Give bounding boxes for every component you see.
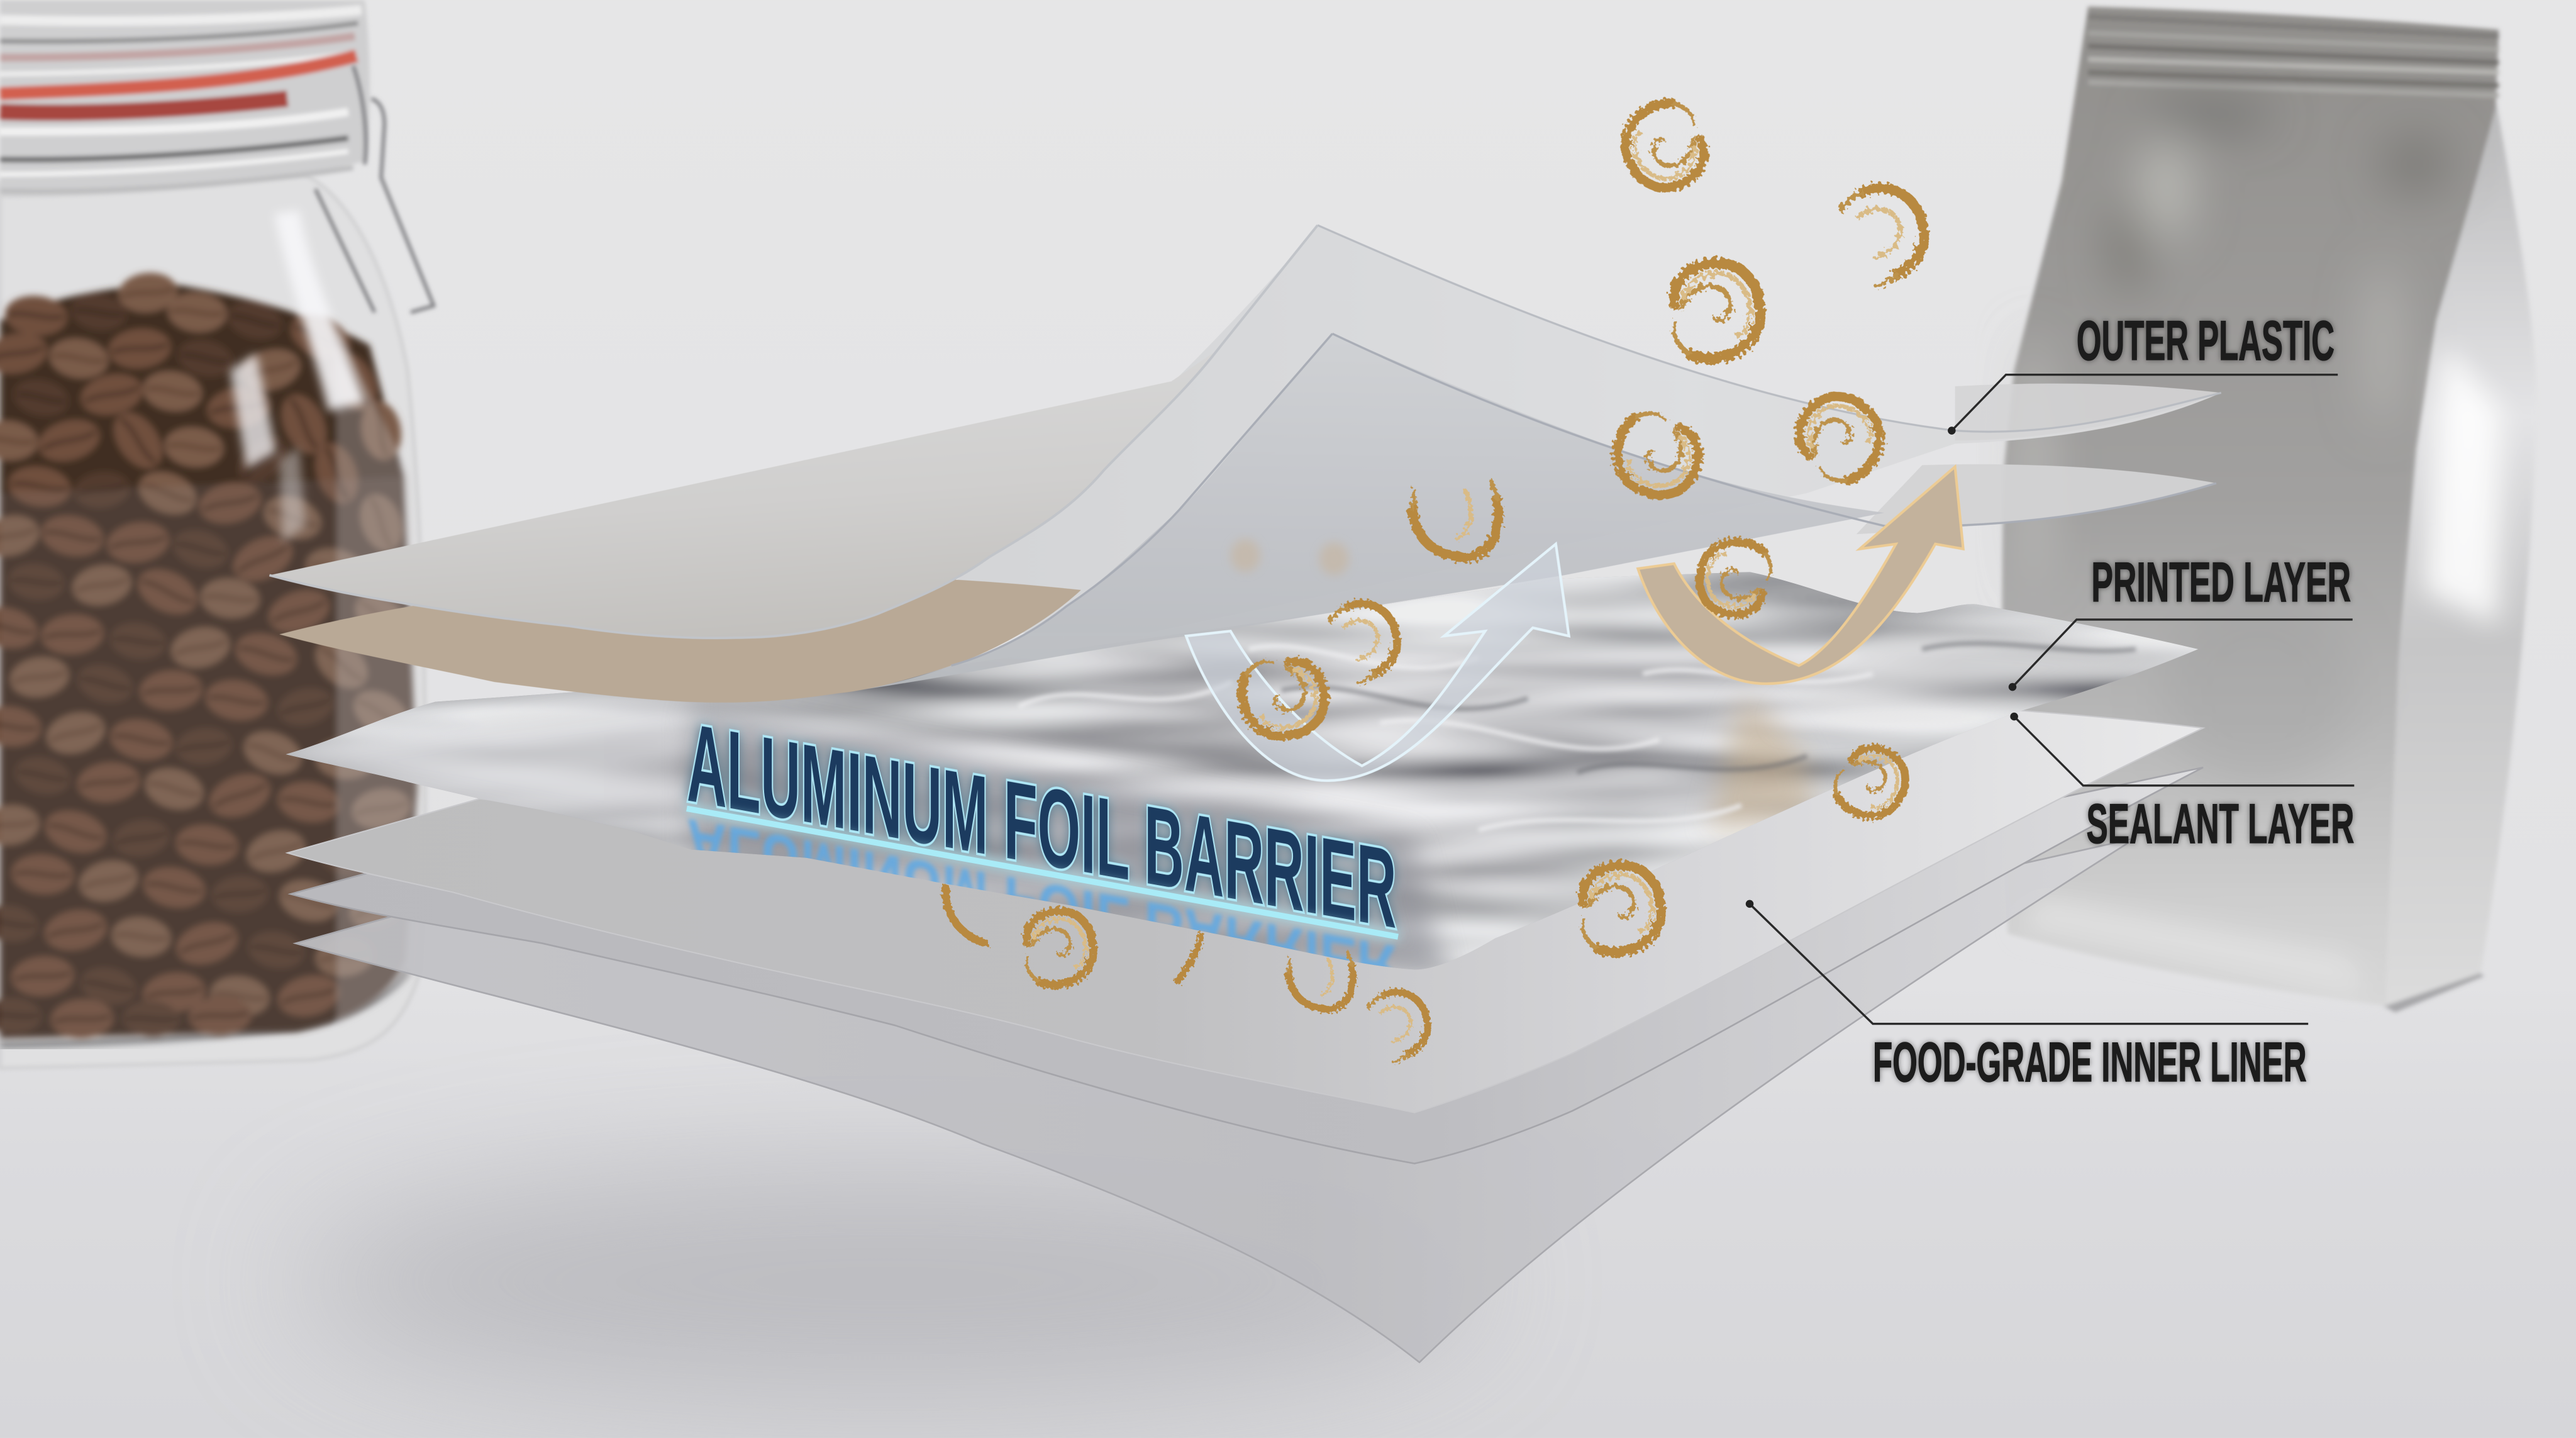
callout: outer plastic: OUTER PLASTIC	[2077, 309, 2334, 372]
tan arrow: aroma blocked	[1638, 467, 1963, 684]
coffee beans	[0, 270, 421, 1040]
sealant layer sheet	[287, 710, 2203, 1113]
coffee aroma swirl under foil 3	[1178, 935, 1201, 981]
jar glass body	[0, 174, 425, 1068]
bottom inner liner sheet	[296, 838, 2136, 1363]
coffee aroma swirl under foil 2	[1026, 911, 1093, 985]
outer sheet right lobe	[1955, 384, 2221, 440]
coffee aroma swirl mid 4	[1690, 531, 1778, 623]
callout: printed layer: PRINTED LAYER	[2091, 551, 2351, 613]
coffee aroma swirl mid 3	[1413, 482, 1499, 557]
printed sheet film	[836, 333, 1884, 694]
foil barrier heading	[687, 699, 1398, 952]
coffee aroma swirl top 2	[1841, 188, 1923, 287]
glass highlights	[230, 211, 365, 542]
callout: sealant layer: SEALANT LAYER	[2087, 793, 2354, 855]
printed sheet edge	[951, 333, 2216, 666]
callout: sealant layer	[2010, 713, 2354, 855]
outer sheet edge	[1318, 225, 2221, 432]
coffee aroma swirl low 2	[1242, 661, 1324, 736]
callout: food-grade inner liner	[1746, 900, 2308, 1093]
infographic scene: ALUMINUM FOIL BARRIER	[687, 803, 1396, 1009]
coffee aroma swirl under foil 4	[1289, 952, 1353, 1009]
coffee aroma swirl mid 2	[1785, 381, 1896, 493]
silver foil coffee bag	[2002, 7, 2536, 1012]
coffee aroma swirl low 1	[1330, 604, 1397, 684]
jar base rim	[0, 969, 408, 1045]
callout: printed layer	[2009, 551, 2353, 691]
outer plastic sheet: left panel	[269, 225, 1318, 638]
coffee aroma swirl on sealant 2	[1826, 737, 1918, 830]
foil texture	[286, 572, 2198, 970]
glass jar of coffee beans	[0, 0, 434, 1068]
callout: outer plastic	[1948, 309, 2338, 435]
bag front face	[2002, 7, 2499, 1006]
glass arrow: oxygen blocked	[1186, 544, 1569, 781]
bag top seal	[2088, 16, 2499, 96]
coffee aroma swirl under foil 5	[1368, 992, 1427, 1063]
printed layer sheet with tan underside	[279, 333, 2216, 703]
jar wire clasp	[316, 66, 434, 312]
coffee aroma swirl top 1	[1614, 95, 1713, 198]
bag ground shadow	[2366, 966, 2484, 1012]
outer sheet front edge	[269, 225, 1318, 638]
bag reflections	[2021, 99, 2451, 789]
coffee aroma swirl top 3	[1674, 263, 1760, 359]
tan printed underside	[279, 575, 1081, 703]
heading underline	[687, 808, 1398, 937]
coffee aroma swirl on sealant 1	[1582, 866, 1661, 952]
coffee aroma swirl mid 1	[1602, 403, 1711, 509]
faint swirl shadows through sheet	[1231, 539, 1349, 575]
floor shadow	[296, 1167, 1479, 1397]
coffee aroma swirl under foil 1	[946, 888, 985, 944]
printed sheet right lobe	[1857, 464, 2216, 534]
bag gusset side	[2385, 99, 2536, 1006]
aluminum foil layer	[286, 572, 2198, 970]
infographic scene: ALUMINUM FOIL BARRIER	[687, 699, 1396, 952]
jar lid and red seal	[0, 0, 370, 198]
outer plastic sheet: curled right side	[887, 225, 2221, 633]
middle sheet	[291, 767, 2203, 1164]
